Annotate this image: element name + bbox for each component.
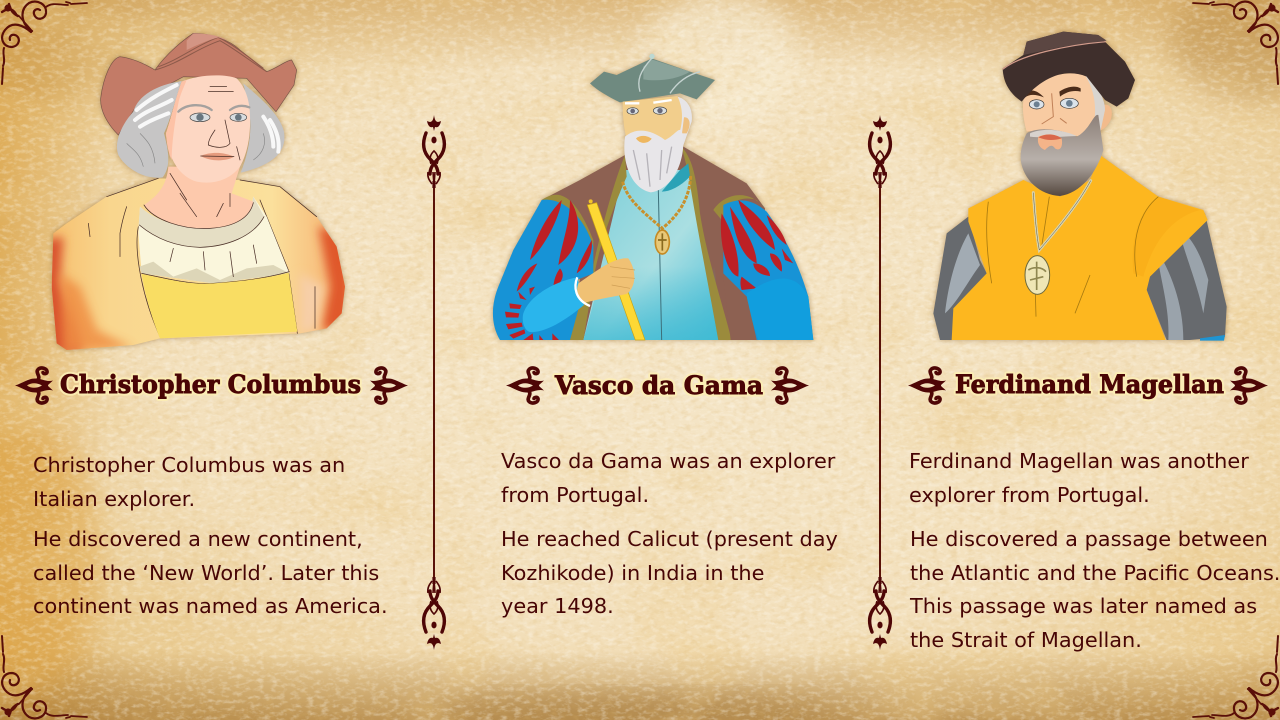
text: Magellan paragraph 1 <box>909 449 1249 507</box>
robe <box>542 147 765 340</box>
flourish right <box>1230 368 1268 403</box>
portrait: Columbus <box>43 33 350 357</box>
flourish left <box>506 368 544 403</box>
sleeves <box>933 217 995 340</box>
text: Columbus paragraph 1 <box>33 453 345 511</box>
text: Gama paragraph 2: He reached Calicut (present day <box>501 527 838 551</box>
flourish right <box>771 368 809 403</box>
text: Columbus paragraph 2: continent was named as America. <box>33 594 388 618</box>
beard <box>1021 115 1103 196</box>
chain and medal <box>623 175 691 228</box>
hair and face <box>677 97 692 150</box>
name: Vasco da Gama: Vasco da Gama <box>554 371 763 400</box>
text: Gama paragraph 2 <box>501 527 838 618</box>
panel: Vasco da Gama <box>490 52 838 618</box>
beard <box>624 130 683 192</box>
text: Magellan paragraph 2 <box>910 527 1280 652</box>
flourish left <box>908 368 946 403</box>
text: Magellan paragraph 2: This passage was later named as <box>910 594 1257 618</box>
body <box>952 155 1208 340</box>
portrait: Magellan <box>933 32 1227 341</box>
text: Columbus paragraph 2 <box>33 527 388 618</box>
text: Gama paragraph 1 <box>501 449 836 507</box>
text: Columbus paragraph 2: He discovered a new continent, <box>33 527 363 551</box>
text: Gama paragraph 2: year 1498. <box>501 594 614 618</box>
panel: Ferdinand Magellan <box>908 29 1280 652</box>
text: Gama paragraph 2: Kozhikode) in India in the <box>501 561 764 585</box>
text: Columbus paragraph 1: Christopher Columbus was an <box>33 453 345 477</box>
hand <box>577 258 634 303</box>
left sleeve <box>493 200 593 340</box>
text: Columbus paragraph 2: called the ‘New World’. Later this <box>33 561 379 585</box>
hair <box>117 81 182 178</box>
flourish right <box>370 368 408 403</box>
right sleeve <box>723 200 813 340</box>
name: Columbus: Christopher Columbus <box>60 370 361 399</box>
name: Magellan: Ferdinand Magellan <box>955 370 1224 399</box>
flourish left <box>15 368 53 403</box>
shirt <box>138 197 289 283</box>
text: Gama paragraph 1: from Portugal. <box>501 483 649 507</box>
name: Columbus: Christopher Columbus <box>60 370 361 399</box>
hat <box>101 33 297 135</box>
chain <box>1033 181 1091 250</box>
portrait: Vasco da Gama <box>493 54 813 340</box>
name: Vasco da Gama: Vasco da Gama <box>554 371 763 400</box>
text: Magellan paragraph 1: Ferdinand Magellan was another <box>909 449 1249 473</box>
face <box>166 75 250 183</box>
panel: Christopher Columbus <box>15 30 408 618</box>
text: Magellan paragraph 2: He discovered a passage between <box>910 527 1268 551</box>
name: Magellan: Ferdinand Magellan <box>955 370 1224 399</box>
divider left <box>422 115 446 650</box>
yellow vest <box>142 273 297 338</box>
hat <box>590 58 715 102</box>
neck <box>144 167 253 229</box>
text: Gama paragraph 1: Vasco da Gama was an explorer <box>501 449 835 473</box>
text: Magellan paragraph 1: explorer from Portugal. <box>909 483 1150 507</box>
hat <box>1003 32 1135 107</box>
text: Columbus paragraph 1: Italian explorer. <box>33 487 195 511</box>
staff <box>587 203 645 340</box>
tunic <box>583 170 718 340</box>
divider right <box>868 115 892 650</box>
text: Magellan paragraph 2: the Atlantic and the Pacific Oceans. <box>910 561 1280 585</box>
face <box>1098 105 1112 130</box>
text: Magellan paragraph 2: the Strait of Magellan. <box>910 628 1142 652</box>
